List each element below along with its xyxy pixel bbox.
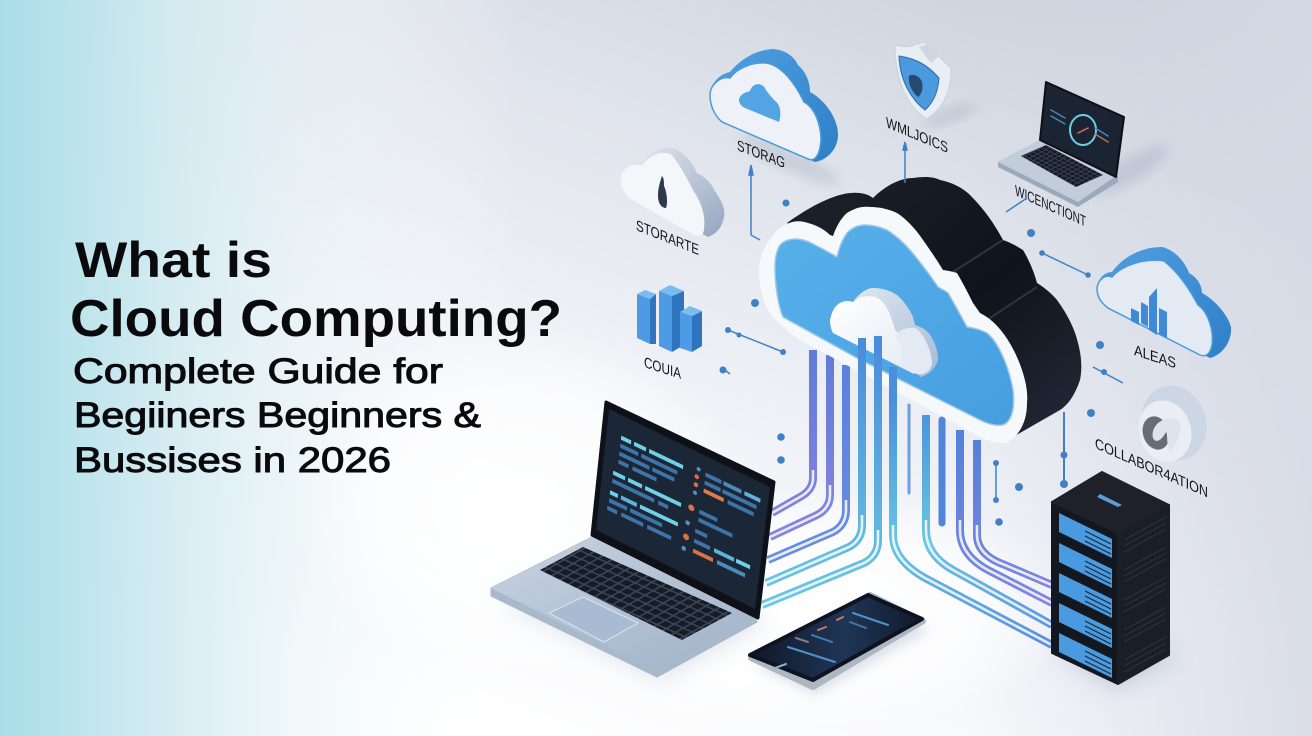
label: WMLJOICS: WMLJOICS bbox=[886, 115, 948, 157]
phone screen bbox=[750, 595, 922, 680]
disc face bbox=[1131, 393, 1199, 469]
link near alerts bbox=[1093, 367, 1123, 383]
server top bbox=[1052, 472, 1169, 533]
label: ALEAS: ALEAS bbox=[1134, 342, 1176, 372]
disc back bbox=[1132, 377, 1216, 469]
icon: small cloud bbox=[739, 84, 780, 122]
shield bbox=[895, 42, 979, 131]
link to bar chart bbox=[728, 330, 783, 352]
cloud body bbox=[621, 148, 724, 237]
shadow bbox=[1085, 137, 1175, 203]
cloud face bbox=[621, 153, 704, 236]
shadow bbox=[500, 560, 770, 680]
collaboration icon bbox=[1131, 377, 1216, 469]
swirl bbox=[1138, 413, 1174, 453]
server top slot bbox=[1097, 494, 1122, 507]
tick bbox=[721, 367, 730, 374]
server unit 3 bbox=[1052, 562, 1169, 624]
shadow bbox=[1052, 630, 1180, 690]
shield keyhole bbox=[909, 75, 923, 97]
cloud white rim bbox=[759, 207, 1027, 443]
phone body bbox=[751, 595, 923, 687]
storage cloud (top) bbox=[710, 49, 844, 192]
bar 2 bbox=[659, 291, 672, 352]
drop line to server bbox=[1063, 412, 1065, 484]
shadow bbox=[921, 99, 979, 131]
cloud body bbox=[710, 49, 838, 162]
server unit 4 bbox=[1052, 592, 1169, 654]
bar chart icon bbox=[637, 285, 702, 352]
label: STORAG: STORAG bbox=[737, 137, 785, 172]
alerts cloud (right) bbox=[1097, 247, 1231, 358]
arrow to storage cloud bbox=[749, 165, 760, 240]
tube highlights bbox=[768, 470, 1052, 625]
heading: What is: What is bbox=[75, 232, 272, 288]
subheading line 2: Begiiners Beginners & bbox=[74, 396, 481, 435]
arrow to small laptop bbox=[1006, 198, 1027, 212]
cloud black extrusion bbox=[787, 177, 1081, 437]
server stack bbox=[1052, 472, 1180, 690]
link to alerts cloud bbox=[1042, 253, 1088, 275]
bar 3 bbox=[680, 312, 692, 352]
inner white cloud bbox=[830, 288, 938, 377]
screen code text bars bbox=[607, 428, 761, 583]
heading: Cloud Computing?: Cloud Computing? bbox=[70, 290, 562, 348]
short drop lines bbox=[909, 405, 942, 523]
code column left bbox=[607, 433, 685, 543]
keyboard bbox=[1021, 145, 1103, 187]
title bbox=[70, 232, 562, 480]
shadow bbox=[736, 128, 844, 192]
subheading line 1: Complete Guide for bbox=[73, 352, 443, 391]
storage cloud (left) bbox=[621, 148, 724, 237]
screen display bbox=[596, 409, 770, 609]
trackpad bbox=[549, 597, 638, 642]
server unit 2 bbox=[1052, 532, 1169, 594]
screen bezel bbox=[592, 402, 774, 618]
server unit 5 bbox=[1052, 622, 1169, 684]
label: WICENCTIONT: WICENCTIONT bbox=[1015, 183, 1086, 231]
main cloud bbox=[759, 177, 1081, 443]
phone content bbox=[775, 613, 888, 668]
keyboard bbox=[540, 547, 732, 640]
label: STORARTE: STORARTE bbox=[636, 217, 699, 259]
wires in front of cloud bbox=[762, 336, 1052, 645]
phone bbox=[750, 595, 930, 695]
bar 1 bbox=[637, 294, 650, 344]
chart ring on screen bbox=[1070, 115, 1096, 145]
label: COUIA: COUIA bbox=[644, 354, 682, 383]
icon: keyhole bbox=[658, 176, 667, 208]
cloud face bbox=[710, 63, 821, 160]
small laptop bbox=[998, 82, 1175, 207]
main laptop bbox=[491, 402, 774, 680]
icon: bar chart bbox=[1131, 288, 1167, 338]
arrow to shield bbox=[903, 142, 907, 183]
screen bbox=[1040, 82, 1124, 177]
link near server bbox=[995, 463, 997, 500]
shield face bbox=[899, 56, 939, 110]
code column right bbox=[681, 463, 761, 583]
cloud blue face bbox=[775, 225, 1014, 425]
cloud body bbox=[1097, 247, 1231, 358]
shield body bbox=[895, 42, 951, 119]
connector lines and dots bbox=[720, 142, 1123, 526]
node dots bbox=[720, 200, 1107, 526]
subheading line 3: Bussises in 2026 bbox=[74, 441, 391, 480]
shadow bbox=[755, 600, 930, 695]
base edge bbox=[491, 537, 757, 677]
server unit 1 bbox=[1052, 502, 1169, 564]
wires to server bbox=[926, 415, 1052, 625]
wires to laptop bbox=[768, 350, 846, 560]
label: COLLABOR4ATION: COLLABOR4ATION bbox=[1095, 436, 1208, 502]
cloud face bbox=[1097, 260, 1212, 356]
connector wires behind cloud bbox=[768, 350, 1052, 625]
base top bbox=[491, 537, 755, 671]
base bbox=[998, 140, 1118, 207]
shield tab bbox=[919, 44, 939, 63]
